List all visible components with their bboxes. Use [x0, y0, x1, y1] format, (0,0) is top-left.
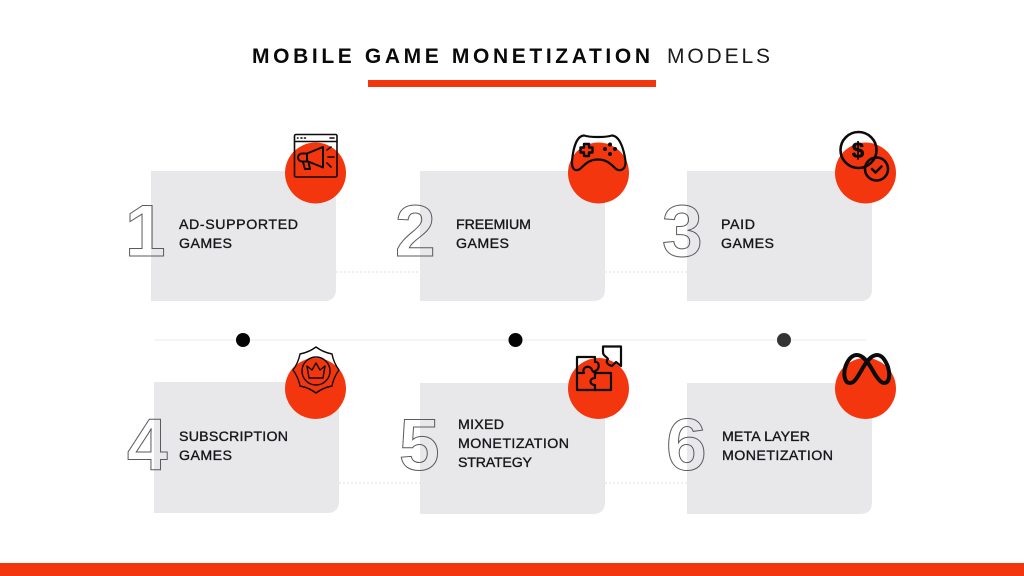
footer bar	[0, 563, 1024, 576]
icon: game controller	[572, 136, 626, 170]
label	[722, 429, 833, 464]
timeline divider with dots	[154, 333, 866, 347]
number 6: 6	[666, 405, 707, 486]
title: MODELS	[667, 45, 770, 68]
label: GAMES	[179, 448, 232, 464]
label: MIXED	[458, 417, 504, 433]
label: FREEMIUM	[456, 217, 531, 233]
title: MOBILE GAME MONETIZATION	[252, 45, 650, 68]
number 1: 1	[125, 191, 166, 272]
label: META LAYER	[722, 429, 810, 445]
label	[721, 217, 774, 252]
icon: puzzle pieces	[577, 346, 621, 390]
label	[179, 217, 298, 252]
icon: crown badge	[293, 347, 339, 393]
title underline	[368, 80, 656, 87]
label: MONETIZATION	[458, 436, 569, 452]
label: PAID	[721, 217, 755, 233]
panel: ad-supported games	[125, 134, 346, 301]
label: GAMES	[179, 236, 232, 252]
label: AD-SUPPORTED	[179, 217, 298, 233]
icon: browser with megaphone	[294, 134, 337, 177]
panel: mixed monetization strategy	[399, 346, 629, 514]
label: GAMES	[456, 236, 509, 252]
label: MONETIZATION	[722, 448, 833, 464]
label	[456, 217, 531, 252]
number 2: 2	[395, 191, 436, 272]
label: GAMES	[721, 236, 774, 252]
panel: paid games	[662, 132, 896, 301]
panel: meta layer monetization	[666, 355, 896, 514]
icon: coins with check	[840, 132, 888, 180]
icon: coins with check: $	[852, 138, 864, 163]
label: STRATEGY	[458, 455, 533, 471]
panel: subscription games	[127, 347, 346, 513]
panel: freemium games	[395, 136, 629, 301]
label	[179, 429, 288, 464]
number 4: 4	[127, 405, 168, 486]
label	[458, 417, 569, 471]
label: SUBSCRIPTION	[179, 429, 288, 445]
number 5: 5	[399, 405, 440, 486]
number 3: 3	[662, 191, 703, 272]
icon: meta infinity logo	[844, 355, 889, 383]
